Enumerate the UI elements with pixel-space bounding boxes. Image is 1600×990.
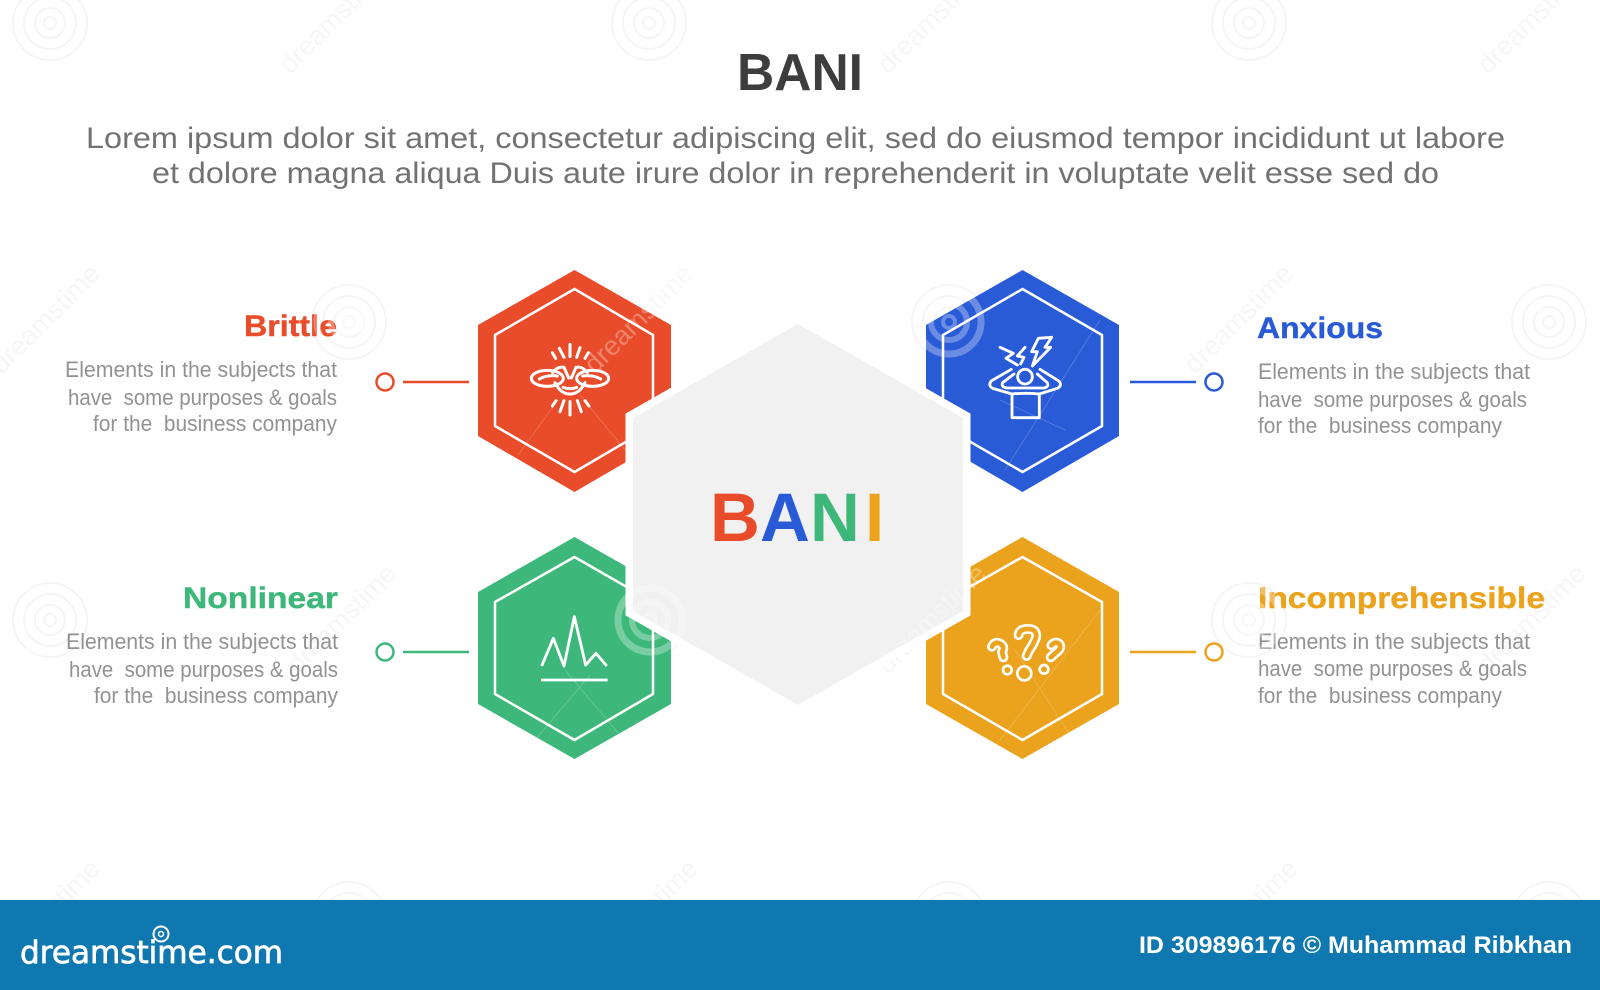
connector: Nonlinear [376, 644, 469, 660]
icon: anxious head [990, 337, 1061, 418]
text block: Anxious: Elements in the subjects that [1258, 359, 1530, 384]
text block: Nonlinear: Nonlinear [183, 582, 338, 615]
text block: Incomprehensible: have some purposes & goals [1258, 656, 1527, 681]
title: BANI [737, 44, 863, 102]
text block: Anxious: have some purposes & goals [1258, 387, 1527, 412]
watermark overlay: dreamstime [578, 258, 699, 379]
text block: Brittle: Elements in the subjects that [65, 357, 337, 382]
text block: Anxious: Anxious [1257, 312, 1383, 345]
centre label BANI: N [810, 479, 860, 556]
connector: Incomprehensible [1130, 644, 1222, 660]
text block: Nonlinear: for the business company [94, 683, 338, 708]
hexagon: Nonlinear [478, 537, 671, 759]
watermark overlay: dreamstime [871, 558, 992, 679]
centre label BANI: I [865, 479, 884, 556]
watermark background: dreamstime [871, 558, 992, 679]
text block: Anxious [1257, 312, 1530, 438]
connector: Anxious [1130, 374, 1222, 390]
centre label BANI: A [760, 479, 810, 556]
watermark background: dreamstime [281, 558, 402, 679]
icon: question marks [992, 629, 1060, 680]
watermark background: dreamstime [1471, 558, 1592, 679]
text block: Incomprehensible [1258, 582, 1545, 708]
text block: Nonlinear: have some purposes & goals [69, 657, 338, 682]
text block: Incomprehensible: Incomprehensible [1258, 582, 1545, 615]
watermark background: dreamstime [583, 853, 704, 974]
watermark background: dreamstime [1178, 258, 1299, 379]
text block: Incomprehensible: for the business company [1258, 683, 1502, 708]
subtitle: Lorem ipsum dolor sit amet, consectetur adipiscing elit, sed do eiusmod tempor incididunt ut labore [86, 122, 1505, 155]
footer credit: ID 309896176 © Muhammad Ribkhan [1139, 932, 1572, 959]
text block: Nonlinear [66, 582, 338, 708]
footer bar [0, 900, 1600, 990]
connector: Brittle [376, 374, 469, 390]
watermark overlay [317, 258, 1281, 740]
text block: Brittle [65, 310, 337, 436]
footer logo: dreamstime.com [20, 935, 283, 971]
hexagon: Incomprehensible [926, 537, 1119, 759]
icon: broken chain [531, 344, 609, 415]
subtitle [86, 122, 1505, 190]
text block: Incomprehensible: Elements in the subjects that [1258, 629, 1530, 654]
text block: Brittle: Brittle [244, 310, 337, 343]
text block: Brittle: have some purposes & goals [68, 385, 337, 410]
hexagon: Brittle [478, 270, 671, 492]
subtitle: et dolore magna aliqua Duis aute irure dolor in reprehenderit in voluptate velit esse sed do [152, 157, 1439, 190]
centre hexagon [633, 324, 963, 705]
icon: nonlinear chart [541, 617, 608, 680]
text block: Nonlinear: Elements in the subjects that [66, 629, 338, 654]
hexagon: Anxious [926, 270, 1119, 492]
watermark background: dreamstime [1183, 853, 1304, 974]
watermark background: dreamstime [578, 258, 699, 379]
centre label BANI: B [710, 479, 760, 556]
text block: Anxious: for the business company [1258, 413, 1502, 438]
text block: Brittle: for the business company [93, 411, 337, 436]
